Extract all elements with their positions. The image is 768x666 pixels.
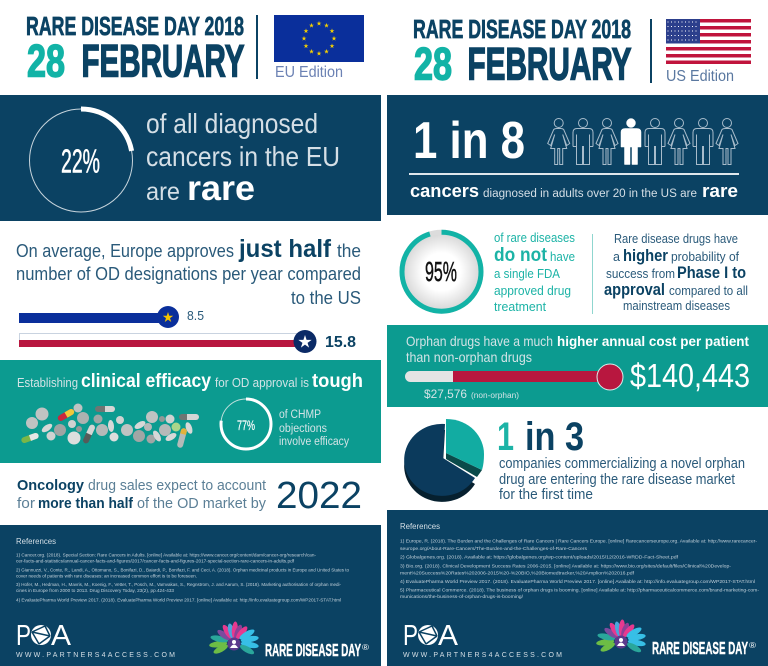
text: higher probability of success: a: [613, 249, 621, 264]
panel: EU references and logos: [0, 525, 381, 666]
donut: 77%: [221, 399, 271, 449]
donut: 77%: 77%: [237, 417, 255, 433]
text: Europe approves just half: the: [337, 240, 361, 261]
logo: POA (EU): [16, 620, 175, 659]
heading: 28 February (EU): 28: [27, 36, 65, 86]
panel: EU header: [26, 13, 364, 86]
heading: 28 February (EU): [27, 36, 244, 86]
heading: higher annual cost per patient: Orphan drugs have a much: [406, 333, 553, 349]
panel: 95% and higher probability: [402, 230, 748, 314]
illustration: pills: [21, 404, 199, 448]
logo: Rare Disease Day (US): ®: [749, 641, 756, 650]
text: do not have an FDA approved treatment: [494, 230, 575, 314]
heading: 28 February (EU): FEBRUARY: [82, 36, 244, 86]
text: of all diagnosed cancers in the EU are rare: cancers in the EU: [146, 141, 340, 172]
text: higher probability of success: higher: [623, 246, 668, 265]
references list (EU): [16, 537, 349, 602]
heading: higher annual cost per patient: [406, 333, 749, 365]
label: $27,576 non-orphan: [424, 387, 519, 401]
panel: 1 in 8 cancers: [387, 95, 768, 215]
references list (US): 2) Globalgenes.org. (2018). Available at: https://globalgenes.org/wp-content/uploads/2015/12/2016-WRDD-Fact-Sheet.pdf: [400, 554, 679, 560]
icon row: eight people, one highlighted: [548, 118, 738, 164]
text: 1 in 3 companies: 1: [497, 415, 514, 459]
text block: oncology drug sales by 2022: of the OD market by: [137, 495, 266, 512]
logo: Rare Disease Day (EU): [209, 621, 369, 660]
references list (US): 5) Pharmaceutical Commerce. (2018). The business of orphan drugs is booming. [online] Available at: http://pharmaceuticalcommerce.com/brand-marketing-com-: [400, 588, 760, 592]
references list (US): [400, 522, 760, 599]
references list (US): ment%20Success%20Rates%202006-2015%20-%20BIO,%20Biomedtracker,%20Amplion%202016.pdf: [400, 570, 635, 576]
logo: Rare Disease Day (US): [596, 619, 756, 658]
text: do not have an FDA approved treatment: treatment: [494, 299, 546, 314]
text: of all diagnosed cancers in the EU are rare: rare: [187, 169, 255, 208]
bar: US 15.8: 15.8: [325, 334, 356, 351]
bar: US 15.8: [19, 330, 356, 353]
text: higher probability of success: Rare disease drugs have: [614, 231, 738, 246]
references list (US): 3) Bio.org. (2018). Clinical Development Success Rates 2006-2015. [online] Available at: https://www.bio.org/sites/default/files/Clinical%20Develop-: [400, 564, 732, 568]
chart: 1 in 3 pie: [404, 419, 484, 502]
text block: oncology drug sales by 2022: Oncology: [17, 477, 85, 494]
text: of CHMP objections involve efficacy: involve efficacy: [279, 436, 349, 448]
text block: oncology drug sales by 2022: drug sales expect to account: [88, 477, 267, 494]
text: higher probability of success: approval: [604, 280, 665, 299]
references list (US): 1) Europe, R. (2018). The Burden and the Challenges of Rare Cancers | Rare Cancers Europe. [online] Rarecancerseurope.org. Available at: http://www.rarecancer-: [400, 538, 758, 544]
references list (EU): cover needs of patients with rare diseases: an increased common effort is to be foreseen.: [16, 574, 197, 578]
heading: clinical efficacy is tough: Establishing: [17, 376, 78, 390]
heading: 28 February (US): [414, 38, 632, 90]
bar: EU 8.5: [19, 306, 204, 328]
label: $27,576 non-orphan: $27,576: [424, 387, 467, 401]
logo: POA (EU): A: [51, 620, 72, 652]
text block: oncology drug sales by 2022: [17, 475, 362, 517]
logo: POA (EU): WWW.PARTNERS4ACCESS.COM: [16, 652, 175, 659]
panel: US header: [413, 16, 751, 90]
text: Europe approves just half: just half: [238, 235, 332, 263]
label: $27,576 non-orphan: (non-orphan): [471, 391, 519, 400]
caption: cancers diagnosed in adults over 20: diagnosed in adults over 20 in the US are: [483, 188, 697, 200]
text: do not have an FDA approved treatment: a single FDA: [494, 266, 560, 281]
panel: clinical efficacy: [0, 360, 381, 463]
text: Europe approves just half: [16, 235, 361, 308]
logo: Rare Disease Day (EU): RARE DISEASE DAY: [265, 640, 361, 660]
stat: $140,443: $140,443: [630, 357, 750, 394]
donut: 95%: [402, 232, 481, 311]
stat: 1 in 8: 1 in 8: [413, 112, 525, 170]
panel: orphan drug cost: [387, 325, 768, 407]
heading: clinical efficacy is tough: [17, 371, 363, 392]
text: 1 in 3 companies: drug are entering the rare disease market: [499, 472, 735, 488]
text: of CHMP objections involve efficacy: [279, 409, 349, 448]
text: higher probability of success: [604, 231, 748, 313]
bar: EU 8.5: 8.5: [187, 309, 204, 323]
text: Europe approves just half: On average, Europe approves: [16, 240, 234, 261]
references list (EU): References: [16, 537, 56, 546]
logo: POA (US): A: [438, 620, 459, 652]
panel: US references and logos: [387, 510, 768, 666]
heading: 28 February (US): 28: [414, 38, 452, 90]
logo: POA (US): [403, 620, 562, 659]
text: 1 in 3 companies: [497, 415, 745, 503]
text: higher probability of success: success from: [606, 266, 675, 281]
text block: oncology drug sales by 2022: more than half: [38, 495, 134, 512]
label: US Edition: US Edition: [666, 68, 734, 85]
text: do not have an FDA approved treatment: do not: [494, 245, 548, 266]
text: higher probability of success: mainstream diseases: [623, 298, 730, 313]
text block: oncology drug sales by 2022: 2022: [276, 475, 362, 517]
panel: 22% of cancers: [0, 95, 381, 221]
caption: cancers diagnosed in adults over 20: cancers: [410, 181, 479, 201]
donut: 95%: 95%: [425, 256, 457, 287]
references list (EU): cer-facts-and-statistics/annual-cancer-facts-and-figures/2017/cancer-facts-and-figures-2017-special-section-rare-cancers-in-adults.pdf: [16, 558, 295, 564]
logo: Rare Disease Day (EU): ®: [362, 643, 369, 652]
references list (EU): 2) Giannuzzi, V., Conte, R., Landi, A., Ottomano, S., Bonifazi, D., Baiardi, P., Bonifazi, F. and Ceci, A. (2018). Orphan medicinal products in Europe and United States to: [16, 568, 349, 572]
text block: oncology drug sales by 2022: for: [17, 495, 35, 512]
caption: cancers diagnosed in adults over 20: rare: [702, 181, 738, 201]
label: EU Edition: EU Edition: [275, 64, 343, 81]
references list (US): References: [400, 522, 440, 531]
panel: OD designations comparison: [16, 235, 361, 353]
text: higher probability of success: Phase I to: [677, 263, 746, 282]
heading: 28 February (US): FEBRUARY: [468, 38, 632, 90]
text: of CHMP objections involve efficacy: objections: [279, 423, 327, 435]
text: of CHMP objections involve efficacy: of CHMP: [279, 409, 321, 421]
heading: clinical efficacy is tough: tough: [312, 371, 363, 392]
references list (US): 4) EvaluatePharma World Preview 2017. (2018). EvaluatePharma World Preview 2017. [online] Available at: http://info.evaluategroup.com/WP2017-STAT.html: [400, 579, 755, 584]
chart: thermometer bar: [405, 364, 623, 390]
references list (EU): 1) Cancer.org. (2018). Special Section: Rare Cancers in Adults. [online] Available at: https://www.cancer.org/content/dam/cancer-org/research/can-: [16, 552, 316, 558]
heading: Rare Disease Day 2018 (US): RARE DISEASE DAY 2018: [413, 16, 631, 44]
references list (US): munications/the-business-of-orphan-drugs-is-booming/: [400, 594, 524, 599]
text: of all diagnosed cancers in the EU are rare: [146, 108, 340, 208]
logo: POA (EU): P: [16, 620, 31, 652]
heading: clinical efficacy is tough: for OD approval is: [215, 376, 309, 390]
text: higher probability of success: compared to all: [669, 283, 748, 298]
logo: POA (US): WWW.PARTNERS4ACCESS.COM: [403, 652, 562, 659]
text: higher probability of success: probability of: [671, 249, 739, 264]
references list (EU): 3) Hofer, M., Hedman, H., Mavris, M., Koenig, F., Vetter, T., Posch, M., Vamvakas, S., Regnstrom, J. and Aarum, S. (2018). Marketing authorisation of orphan medi-: [16, 582, 341, 587]
donut: 22%: [30, 109, 132, 212]
icon: EU flag: [274, 15, 364, 62]
text: 1 in 3 companies: for the first time: [499, 487, 593, 503]
text: do not have an FDA approved treatment: have: [550, 249, 575, 264]
heading: higher annual cost per patient: higher annual cost per patient: [557, 333, 749, 349]
icon: US flag: [666, 19, 751, 64]
references list (EU): 4) EvaluatePharma World Preview 2017. (2018). EvaluatePharma World Preview 2017. [online] Available at: http://info.evaluategroup.com/WP2017-STAT.html: [16, 598, 341, 602]
heading: higher annual cost per patient: than non-orphan drugs: [406, 349, 532, 365]
text: Europe approves just half: number of OD designations per year compared: [16, 263, 361, 284]
references list (EU): cines in Europe from 2000 to 2013. Drug Discovery Today, 23(2), pp.424-433: [16, 588, 174, 593]
text: Europe approves just half: to the US: [291, 287, 361, 308]
heading: Rare Disease Day 2018 (EU): RARE DISEASE DAY 2018: [26, 13, 244, 41]
references list (US): seurope.org/About-Rare-Cancers/The-Burden-and-the-Challenges-of-Rare-Cancers: [400, 546, 588, 551]
donut: 22%: 22%: [61, 142, 100, 180]
text: of all diagnosed cancers in the EU are rare: of all diagnosed: [146, 108, 318, 139]
caption: cancers diagnosed in adults over 20: [410, 181, 738, 201]
text: of all diagnosed cancers in the EU are rare: are: [146, 178, 180, 206]
text: do not have an FDA approved treatment: approved drug: [494, 283, 571, 298]
text: 1 in 3 companies: in 3: [525, 415, 584, 459]
heading: clinical efficacy is tough: clinical efficacy: [81, 371, 211, 392]
logo: POA (US): P: [403, 620, 418, 652]
text: do not have an FDA approved treatment: of rare diseases: [494, 230, 575, 245]
